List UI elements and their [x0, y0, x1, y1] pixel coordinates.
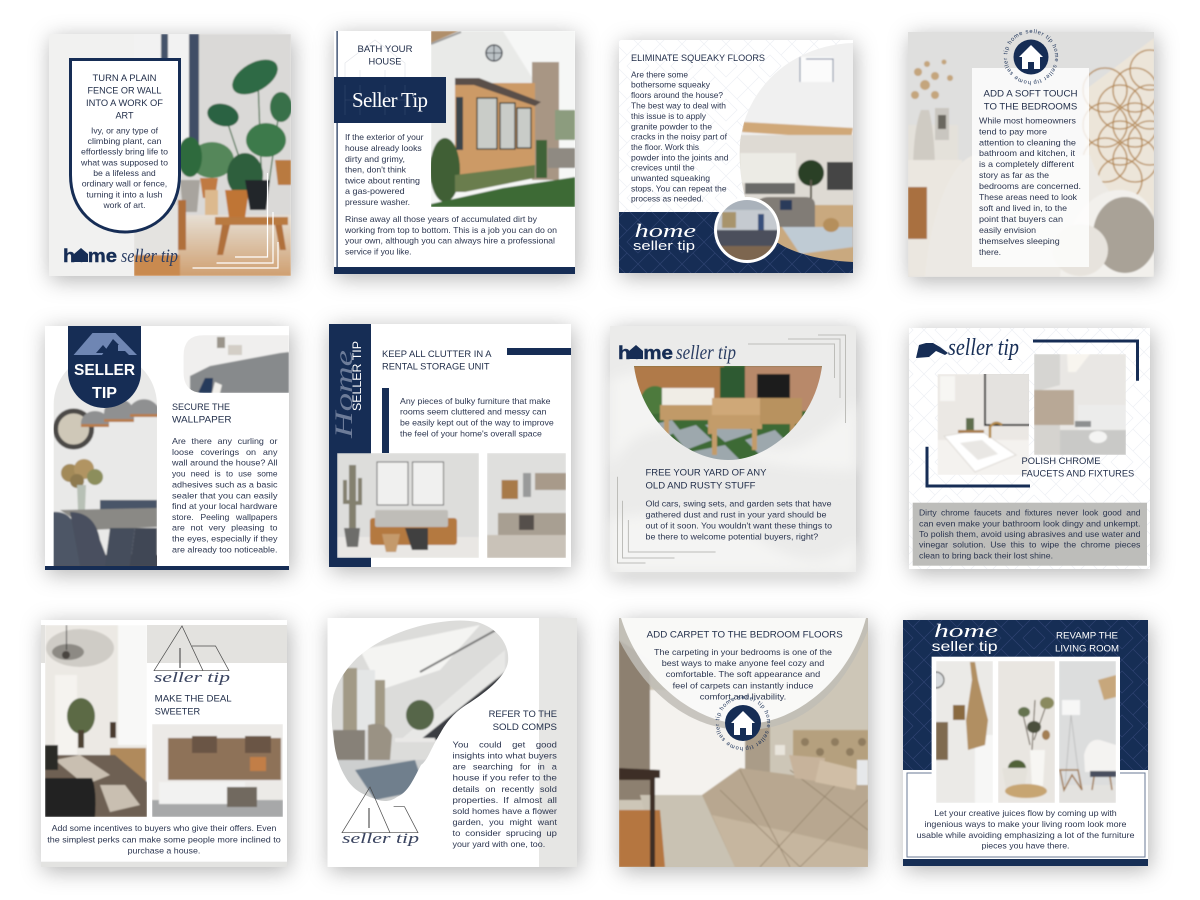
photo: dried flowers on a wall: [936, 661, 993, 803]
body text: Are there some: [631, 69, 688, 79]
heading: [489, 709, 557, 733]
body text: effortlessly bring life to: [81, 147, 168, 157]
photo: potted plant and vase: [998, 661, 1055, 803]
body text: [646, 499, 832, 541]
body text: If the exterior of your: [345, 132, 424, 142]
body text: climbing plant, can: [88, 136, 162, 146]
logo: [154, 626, 231, 686]
heading: [382, 349, 492, 373]
card 4: add a soft touch to the bedrooms: [897, 23, 1169, 294]
body text: are not very pleasing to: [172, 523, 278, 533]
navy side strip with vertical title: [329, 324, 371, 567]
photo: patio furniture in half circle: [634, 366, 822, 460]
heading: BATH YOUR: [358, 44, 413, 55]
body text: Ivy, or any type of: [91, 125, 159, 135]
body text: granite powder to the: [631, 121, 712, 131]
body text: the eyes, especially if they: [172, 534, 278, 544]
photo: bright living room in a circle: [740, 43, 853, 262]
body text: be easily kept out of the way to improve: [400, 418, 554, 428]
logo: seller tip: [948, 335, 1019, 361]
heading: SOLD COMPS: [493, 722, 557, 733]
navy side strip with vertical title: SELLER TIP: [352, 341, 364, 411]
body text: soft and lived in, to the: [979, 203, 1067, 213]
body text: stops. You can repeat the: [631, 183, 727, 193]
photo: cosy bedroom: [908, 32, 1172, 277]
shield text panel: [70, 60, 180, 232]
translucent white dome: [619, 618, 868, 730]
card 7: free your yard: [610, 326, 856, 572]
light corner lines: [192, 173, 278, 268]
card 1: turn a plain fence into art: [49, 34, 292, 276]
heading: SECURE THE: [172, 402, 230, 413]
heading: HOUSE: [368, 57, 402, 68]
body text: Any pieces of bulky furniture that make: [400, 396, 551, 406]
ghost house outline: [345, 40, 405, 115]
body text: attention to cleaning the: [979, 137, 1076, 147]
logo: [633, 221, 696, 253]
body text: bothersome squeaky: [631, 80, 711, 90]
body text: there.: [979, 247, 1001, 257]
photo: house exterior: [430, 31, 575, 207]
body text: best ways to make anyone feel cozy and: [662, 658, 825, 668]
body text: rooms seem cluttered and messy can: [400, 407, 547, 417]
body text: ingenious ways to make your living room look more: [924, 819, 1127, 829]
seller tip banner: Seller Tip: [352, 88, 428, 112]
heading: [1055, 631, 1119, 654]
body text: work of art.: [102, 200, 146, 210]
photo: plants by a window: [134, 34, 292, 276]
logo: home: [63, 246, 117, 266]
body text: garden, you might want: [452, 817, 558, 827]
body text: wall around the house? All: [171, 458, 278, 468]
heading: RENTAL STORAGE UNIT: [382, 362, 490, 373]
body text: [80, 125, 168, 210]
photo: bathroom interior: [1034, 354, 1126, 455]
body text: to consider sprucing up: [452, 828, 557, 838]
body text: the feel of your home's overall space: [400, 428, 542, 438]
body text: tend to pay more: [979, 126, 1047, 136]
body text: [344, 132, 557, 257]
photo: sofa and framed posters: [337, 453, 479, 558]
white photo frame: [932, 657, 1120, 807]
body text: store. Peeling wallpapers: [172, 512, 278, 522]
body text: loose coverings on any: [172, 447, 278, 457]
body text: powder into the joints and: [631, 152, 729, 162]
body text: sealer that you can easily: [172, 490, 278, 500]
heading: SWEETER: [155, 707, 200, 718]
logo: seller tip: [342, 831, 420, 847]
card 12: revamp the living room: [903, 620, 1148, 866]
heading: ART: [116, 110, 134, 122]
heading: FENCE OR WALL: [88, 86, 162, 96]
heading: REVAMP THE: [1056, 631, 1118, 642]
heading: MAKE THE DEAL: [155, 694, 232, 705]
body text: sold homes have a flower: [452, 806, 557, 816]
heading: [1022, 456, 1134, 480]
card 8: polish chrome faucets: [909, 328, 1150, 569]
photo: modern lounge: [152, 724, 283, 817]
body text: find at your local hardware: [172, 501, 278, 511]
photo: dining room in arch: [53, 350, 158, 567]
heading: [646, 468, 767, 492]
logo: [63, 246, 178, 267]
logo: home: [618, 343, 673, 363]
seller tip banner: [334, 77, 446, 123]
heading: FAUCETS AND FIXTURES: [1022, 469, 1134, 480]
body text: properties. If almost all: [452, 795, 557, 805]
logo: [932, 621, 998, 654]
card 11: add carpet to the bedroom floors: [608, 609, 883, 884]
body text: the floor. Work this: [631, 142, 699, 152]
body text: details on recently sold: [452, 784, 557, 794]
body text: adhesives such as a basic: [172, 479, 278, 489]
body text: comfortable. The soft appearance and: [666, 669, 821, 679]
body text: comfort and livability.: [700, 691, 786, 701]
heading: FREE YOUR YARD OF ANY: [646, 468, 767, 479]
navy corner shape: [619, 212, 853, 273]
photo: staircase lounge in blob: [328, 618, 513, 805]
decorative corner lines: [618, 335, 846, 563]
heading: ADD A SOFT TOUCH: [984, 89, 1078, 100]
heading: TO THE BEDROOMS: [984, 101, 1077, 112]
body text: pressure washer.: [345, 197, 410, 207]
body text: Let your creative juices flow by coming up with: [934, 808, 1117, 818]
body text: point that buyers can: [979, 214, 1063, 224]
body text: what was supposed to: [80, 157, 168, 167]
photo: bathroom sink: [938, 372, 1031, 475]
card 3: eliminate squeaky floors: [619, 40, 855, 275]
body text: bedrooms are concerned.: [979, 181, 1081, 191]
body text: bathroom and kitchen, it: [979, 148, 1076, 158]
body text: cracks in the noisy part of: [631, 132, 728, 142]
photo: bedroom with quilted bed: [619, 618, 868, 867]
body text: be there to welcome potential buyers, right?: [646, 531, 819, 541]
body text: [452, 740, 558, 849]
body text: [171, 436, 278, 554]
body text: usable while avoiding emphasizing a lot of the furniture: [916, 830, 1135, 840]
body text: the simplest perks can make some people more inclined to: [47, 834, 281, 844]
heading: [86, 73, 163, 122]
body text: house if you refer to the: [452, 773, 557, 783]
navy side strip with vertical title: Home: [331, 350, 358, 439]
card 2: bath your house: [334, 31, 575, 274]
heading: WALLPAPER: [172, 415, 232, 426]
body text: easily envision: [979, 225, 1036, 235]
logo: seller tip: [633, 238, 695, 253]
grey body panel: To polish them, avoid using abrasives and use water and: [919, 529, 1141, 539]
body text: is a completely different: [979, 159, 1075, 169]
body text: floors around the house?: [631, 90, 723, 100]
body text: themselves sleeping: [979, 236, 1060, 246]
photo: lamp and armchair: [1059, 661, 1116, 803]
heading: REFER TO THE: [489, 709, 557, 720]
heading: ELIMINATE SQUEAKY FLOORS: [631, 53, 765, 64]
body text: be a lifeless and: [93, 168, 156, 178]
body text: unwanted squeaking: [631, 173, 710, 183]
grey body panel: [913, 503, 1147, 566]
body text: story as far as the: [979, 170, 1049, 180]
body text: These areas need to look: [979, 192, 1078, 202]
body text: this issue is to apply: [631, 111, 707, 121]
body text: [916, 808, 1135, 851]
heading: KEEP ALL CLUTTER IN A: [382, 349, 492, 360]
body text: service if you like.: [345, 247, 412, 257]
body text: crevices until the: [631, 163, 695, 173]
body text: [47, 823, 281, 855]
body text: then, don't think: [345, 164, 407, 174]
heading: ADD CARPET TO THE BEDROOM FLOORS: [647, 630, 843, 641]
body text: Are there any curling or: [172, 436, 278, 446]
navy badge with roof icon and title: TIP: [92, 385, 117, 402]
photo: grey sofa: [183, 335, 289, 393]
body text: [654, 647, 832, 701]
grey body panel: vinegar solution. Use this to wipe the chrome pieces: [919, 540, 1140, 550]
card 10: refer to the sold comps: [328, 618, 577, 867]
body text: a gas-powered: [345, 186, 405, 196]
heading: [358, 44, 413, 68]
navy badge with roof icon and title: SELLER: [74, 362, 135, 379]
heading: POLISH CHROME: [1022, 456, 1100, 467]
body text: out of it soon. You wouldn't want these things to: [646, 520, 832, 530]
heading: OLD AND RUSTY STUFF: [646, 481, 756, 492]
body text: Old cars, swing sets, and garden sets that have: [646, 499, 832, 509]
body text: twice about renting: [345, 176, 420, 186]
marble texture: [610, 371, 856, 572]
heading: LIVING ROOM: [1055, 643, 1119, 654]
heading: INTO A WORK OF: [86, 98, 163, 109]
round house badge: home seller tip home seller tip home seller tip: [716, 695, 770, 752]
body text: dirty and grimy,: [345, 154, 405, 164]
body text: You could get good: [452, 740, 557, 750]
body text: are searching for in a: [452, 762, 557, 772]
navy badge with roof icon and title: [68, 326, 141, 408]
card 6: keep all clutter in a rental storage unit: [329, 324, 571, 567]
grey body panel: can even make your bathroom look dingy and unkempt.: [919, 518, 1140, 528]
body text: process as needed.: [631, 194, 704, 204]
heading: [984, 89, 1078, 112]
heading: [155, 694, 232, 718]
logo: seller tip: [932, 638, 998, 654]
body text: your own, although you can always hire a professional: [345, 236, 555, 246]
logo: [342, 787, 420, 847]
logo: home: [934, 621, 998, 642]
body text: Rinse away all those years of accumulated dirt by: [345, 214, 538, 224]
body text: house already looks: [345, 143, 422, 153]
heading: [172, 402, 232, 426]
heading: TURN A PLAIN: [92, 73, 157, 84]
body text: turning it into a lush: [86, 189, 163, 199]
logo: seller tip: [121, 246, 178, 267]
photo: kitchen: [487, 453, 566, 558]
body text: [400, 396, 554, 438]
body text: your yard with one, too.: [452, 839, 545, 849]
body text: [631, 69, 729, 204]
logo: [916, 335, 1019, 361]
body text: you need is to use some: [172, 469, 278, 479]
translucent text panel: [972, 68, 1089, 267]
logo: home: [634, 221, 696, 242]
card 9: make the deal sweeter: [41, 620, 287, 867]
grey body panel: Dirty chrome faucets and fixtures never look good and: [919, 508, 1141, 518]
body text: feel of carpets can instantly induce: [673, 680, 814, 690]
logo: [618, 342, 736, 364]
photo: hallway with pendant lamp: [45, 625, 147, 817]
body text: purchase a house.: [128, 845, 200, 855]
round house badge: home seller tip home seller tip home seller tip: [1004, 29, 1058, 86]
body text: The carpeting in your bedrooms is one of the: [654, 647, 832, 657]
body text: gathered dust and rust in your yard should be: [646, 509, 827, 519]
body text: insights into what buyers: [452, 751, 557, 761]
body text: ordinary wall or fence,: [82, 179, 167, 189]
body text: [979, 116, 1081, 257]
logo: seller tip: [154, 670, 231, 686]
card 5: secure the wallpaper: [45, 326, 289, 570]
inset circular photo: [714, 197, 780, 263]
body text: While most homeowners: [979, 116, 1076, 126]
body text: working from top to bottom. This is a job you can do on: [344, 225, 557, 235]
grey body panel: clean to bring back their lost shine.: [919, 551, 1053, 561]
body text: The best way to deal with: [631, 100, 726, 110]
body text: are already too noticeable.: [172, 544, 278, 554]
body text: pieces you have there.: [982, 841, 1070, 851]
logo: seller tip: [676, 342, 736, 364]
body text: Add some incentives to buyers who give their offers. Even: [52, 823, 277, 833]
